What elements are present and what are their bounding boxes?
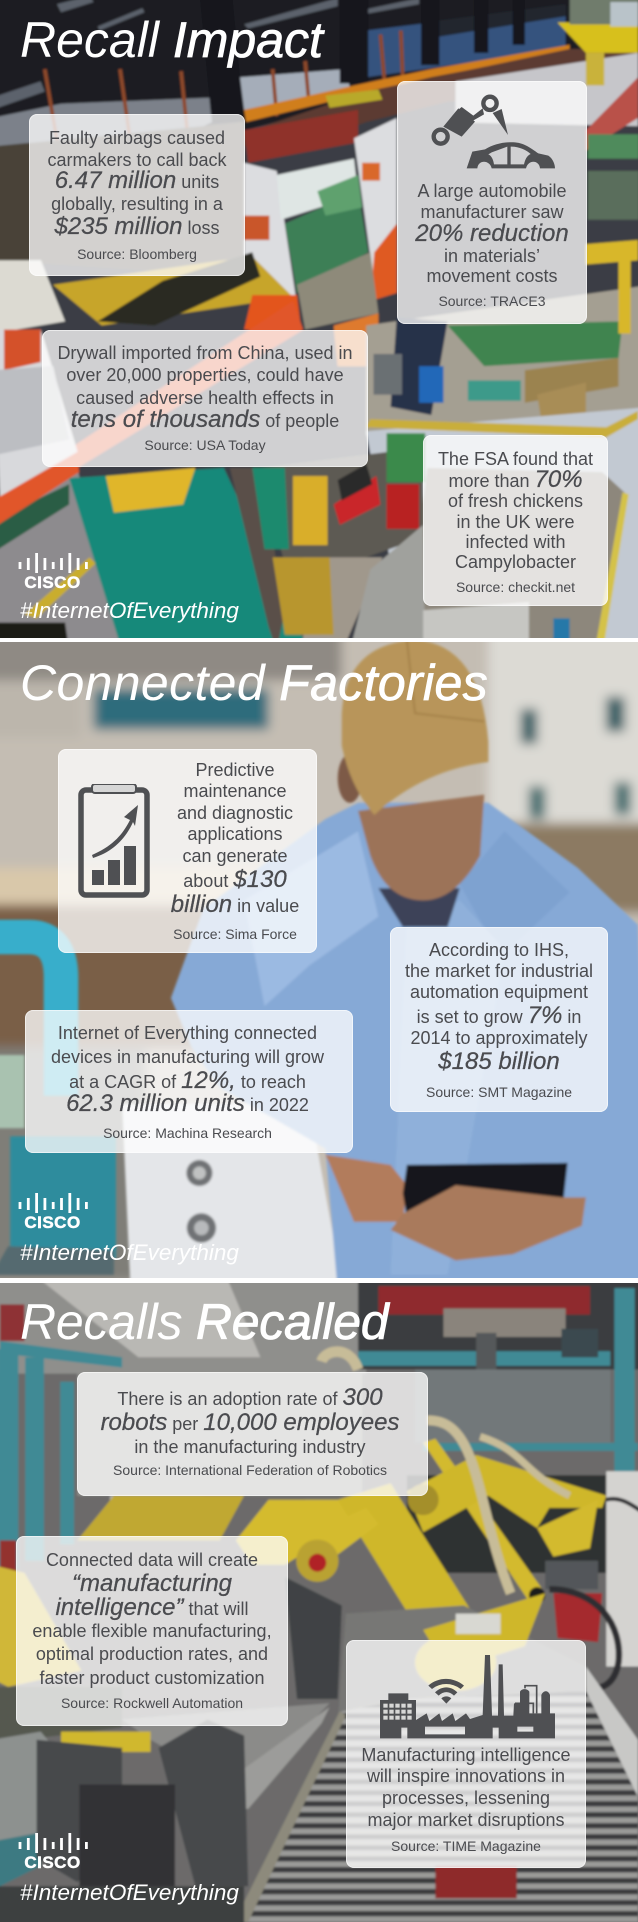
stat text: billion in value <box>171 891 299 918</box>
section: connected factories <box>0 642 638 1278</box>
hashtag: #InternetOfEverything <box>20 1880 239 1904</box>
stat text: in the manufacturing industry <box>134 1437 366 1457</box>
source: Source: Bloomberg <box>77 246 197 262</box>
stat text: 20% reduction <box>415 220 569 247</box>
stat text: Internet of Everything connected <box>58 1023 317 1043</box>
stat text: “manufacturing <box>72 1570 232 1597</box>
background photo: yellow robot arm and conveyor <box>0 1283 638 1922</box>
stat text: automation equipment <box>410 982 588 1002</box>
stat text <box>171 760 299 918</box>
icon: clipboard with growth chart <box>78 784 150 898</box>
stat text: can generate <box>182 846 288 866</box>
source: Source: Machina Research <box>103 1124 272 1140</box>
stat text: A large automobile <box>417 181 567 201</box>
stat text: enable flexible manufacturing, <box>32 1621 272 1641</box>
stat text <box>100 1384 399 1457</box>
stat text: 6.47 million units <box>55 167 219 194</box>
source: Source: International Federation of Robotics <box>113 1462 387 1478</box>
stat text: infected with <box>465 532 566 552</box>
stat text: at a CAGR of 12%, to reach <box>69 1067 306 1094</box>
source: Source: SMT Magazine <box>426 1084 572 1100</box>
stat text: processes, lessening <box>382 1788 550 1808</box>
stat text: maintenance <box>183 781 287 801</box>
stat text <box>405 940 593 1075</box>
source: Source: Sima Force <box>173 926 297 942</box>
hashtag: #InternetOfEverything <box>20 1240 239 1264</box>
stat text <box>57 342 353 433</box>
stat text <box>438 449 593 572</box>
stat text: faster product customization <box>39 1668 265 1688</box>
stat text <box>51 1023 324 1117</box>
stat text: major market disruptions <box>367 1810 565 1830</box>
icon: connected factory skyline with wifi <box>380 1655 555 1738</box>
stat text: the market for industrial <box>405 961 593 981</box>
stat text: is set to grow 7% in <box>417 1002 581 1029</box>
stat text: and diagnostic <box>177 803 293 823</box>
card: chickens <box>423 435 608 606</box>
source: Source: checkit.net <box>456 579 575 595</box>
stat text: Faulty airbags caused <box>49 128 225 148</box>
section: recalls recalled <box>0 1283 638 1922</box>
stat text: more than 70% <box>448 466 583 493</box>
stat text: will inspire innovations in <box>367 1766 565 1786</box>
stat text: intelligence” that will <box>55 1594 249 1621</box>
stat text: over 20,000 properties, could have <box>66 365 344 385</box>
card: manufacturing intelligence <box>16 1536 288 1726</box>
stat text <box>415 181 569 286</box>
source: Source: USA Today <box>144 437 266 453</box>
card: materials movement <box>397 81 587 324</box>
stat text: Manufacturing intelligence <box>361 1745 571 1765</box>
logo: cisco <box>18 553 88 590</box>
hashtag: #InternetOfEverything <box>20 598 239 622</box>
source: Source: Rockwell Automation <box>61 1695 243 1711</box>
card: drywall <box>42 330 368 467</box>
title: Recall Impact <box>20 12 323 68</box>
stat text: $235 million loss <box>54 213 220 240</box>
stat text <box>32 1550 272 1688</box>
icon: robot arm over car body <box>432 94 555 168</box>
card: industrial automation market <box>390 927 608 1112</box>
stat text: of fresh chickens <box>448 491 583 511</box>
stat text: The FSA found that <box>438 449 593 469</box>
stat text: carmakers to call back <box>47 150 227 170</box>
source: Source: TRACE3 <box>438 292 546 308</box>
stat text: Connected data will create <box>46 1550 258 1570</box>
stat text: Drywall imported from China, used in <box>57 342 353 362</box>
stat text <box>361 1745 571 1830</box>
logo: cisco <box>18 1833 88 1870</box>
stat text: caused adverse health effects in <box>76 388 334 408</box>
stat text: movement costs <box>426 266 558 286</box>
stat text: about $130 <box>183 866 287 893</box>
source: Source: TIME Magazine <box>391 1838 541 1854</box>
title: Recalls Recalled <box>20 1294 388 1350</box>
background photo: worker with tablet <box>0 642 638 1278</box>
stat text: applications <box>187 824 283 844</box>
stat text: globally, resulting in a <box>51 194 223 214</box>
stat text: $185 billion <box>438 1048 560 1075</box>
card: innovations <box>346 1640 586 1868</box>
stat text: manufacturer saw <box>420 202 564 222</box>
stat text: in the UK were <box>456 512 575 532</box>
stat text: There is an adoption rate of 300 <box>117 1384 383 1411</box>
stat text: 62.3 million units in 2022 <box>66 1090 309 1117</box>
card: predictive maintenance <box>58 749 317 953</box>
stat text: in materials’ <box>444 246 540 266</box>
title: Connected Factories <box>20 655 488 711</box>
card: connected devices <box>25 1010 353 1153</box>
card: robot adoption <box>77 1372 428 1496</box>
stat text: 2014 to approximately <box>410 1028 588 1048</box>
background photo: factory floor from above <box>0 0 638 638</box>
stat text: According to IHS, <box>429 940 569 960</box>
stat text: tens of thousands of people <box>71 406 339 433</box>
card: faulty airbags <box>29 114 245 276</box>
stat text: devices in manufacturing will grow <box>51 1047 324 1067</box>
stat text: Campylobacter <box>455 552 576 572</box>
stat text: Predictive <box>195 760 275 780</box>
section: recall impact <box>0 0 638 638</box>
stat text: optimal production rates, and <box>36 1644 268 1664</box>
stat text: robots per 10,000 employees <box>101 1408 399 1436</box>
logo: cisco <box>18 1193 88 1230</box>
stat text <box>47 128 227 240</box>
